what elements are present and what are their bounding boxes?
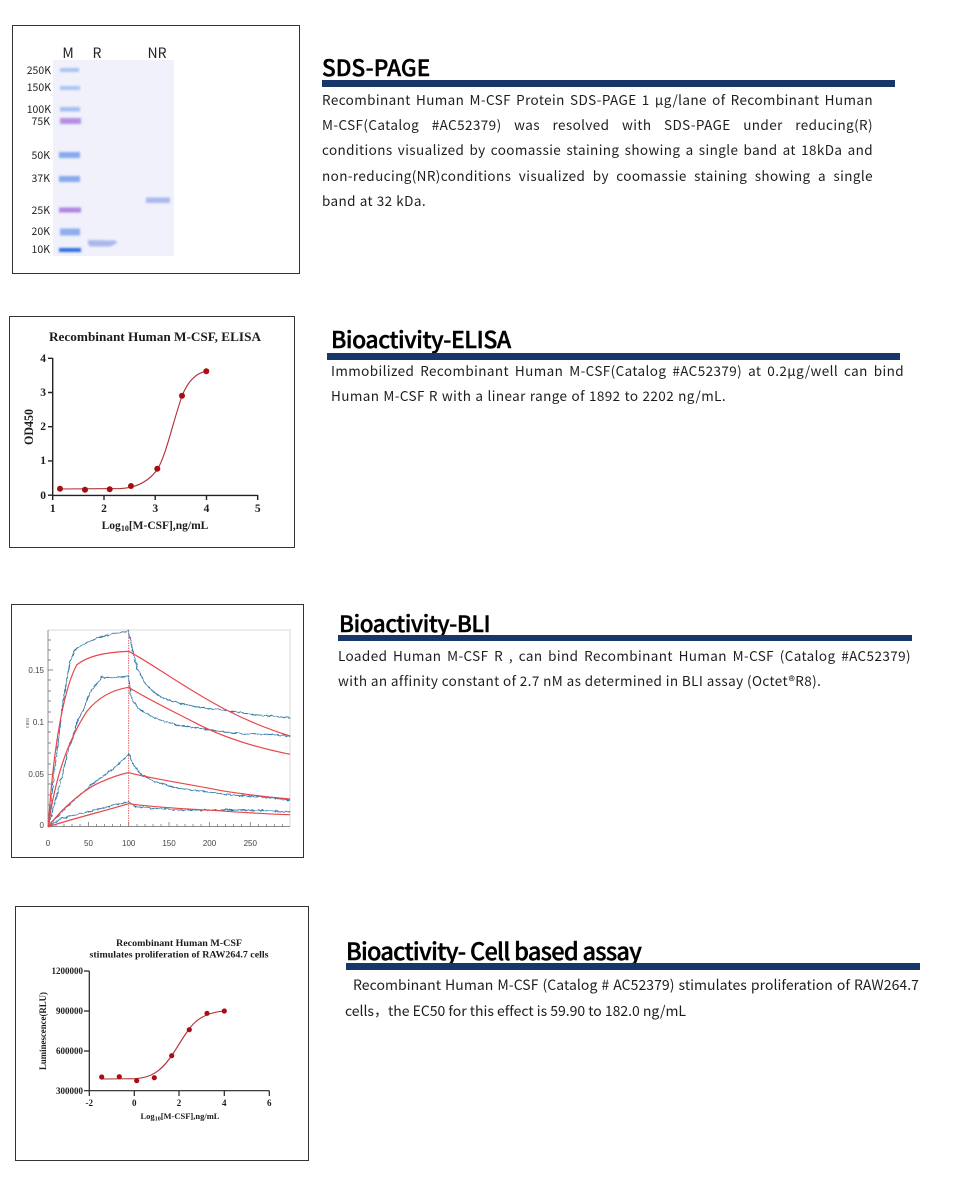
x tick labels: 100 bbox=[122, 839, 136, 848]
marker lane bands bbox=[59, 68, 81, 252]
axes bbox=[84, 971, 269, 1096]
x tick labels: 1 bbox=[50, 503, 56, 515]
heading: Bioactivity-BLI: Bioactivity-BLI bbox=[339, 607, 490, 639]
text block: BLI description: Loaded Human M-CSF R , can bind Recombinant Human M-CSF (Catalog #AC52379) bbox=[338, 645, 911, 665]
text block: SDS-PAGE description bbox=[322, 89, 873, 210]
lane labels: M bbox=[62, 43, 74, 63]
x tick labels bbox=[50, 503, 261, 515]
chart title bbox=[90, 939, 269, 960]
molecular weight labels: 100K bbox=[27, 102, 51, 117]
molecular weight labels: 20K bbox=[32, 224, 50, 239]
y tick labels: 4 bbox=[40, 353, 46, 365]
text block: SDS-PAGE description: band at 32 kDa. bbox=[322, 190, 426, 210]
y tick labels: 0.05 bbox=[28, 770, 45, 779]
heading: Bioactivity-ELISA: Bioactivity-ELISA bbox=[331, 321, 511, 355]
text block: SDS-PAGE description: Recombinant Human M-CSF Protein SDS-PAGE 1 μg/lane of Recombinant Human bbox=[322, 89, 873, 109]
chart title: stimulates proliferation of RAW264.7 cells bbox=[90, 950, 269, 960]
x axis label clipped at edge: Time(s) bbox=[154, 848, 181, 857]
molecular weight labels: 37K bbox=[32, 171, 50, 186]
NR lane band bbox=[146, 198, 170, 203]
fitted curve bbox=[102, 1011, 224, 1079]
x tick labels bbox=[46, 839, 258, 848]
y tick labels bbox=[52, 966, 84, 1096]
y tick labels: 0 bbox=[40, 490, 46, 502]
x tick labels: 0 bbox=[46, 839, 51, 848]
molecular weight labels: 10K bbox=[32, 242, 50, 257]
fitted curve bbox=[60, 371, 206, 489]
y tick labels: 300000 bbox=[56, 1086, 84, 1096]
blue measured traces bbox=[48, 630, 290, 827]
x tick labels: 5 bbox=[255, 503, 261, 515]
y tick labels: 1200000 bbox=[52, 966, 84, 976]
molecular weight labels: 150K bbox=[27, 80, 51, 95]
molecular weight labels bbox=[27, 63, 51, 257]
molecular weight labels: 25K bbox=[32, 203, 50, 218]
x tick labels: 200 bbox=[203, 839, 217, 848]
text block: cell based assay description bbox=[345, 975, 919, 1021]
x tick labels: 4 bbox=[204, 503, 210, 515]
x axis label: [M-CSF],ng/mL bbox=[161, 1111, 220, 1121]
panel: BLI sensorgram chart bbox=[11, 604, 304, 858]
plot frame bbox=[48, 630, 290, 826]
text block: cell based assay description: cells，the EC50 for this effect is 59.90 to 182.0 ng/mL bbox=[345, 1001, 686, 1021]
x tick labels: 2 bbox=[177, 1098, 182, 1108]
lane labels: R bbox=[93, 43, 102, 63]
text block: cell based assay description: Recombinant Human M-CSF (Catalog # AC52379) stimulates proliferation of RAW264.7 bbox=[353, 975, 919, 995]
lane labels bbox=[62, 43, 167, 63]
panel: ELISA chart bbox=[9, 316, 295, 548]
gel background bbox=[53, 60, 174, 256]
axes with ticks bbox=[48, 630, 290, 826]
x axis label: 10 bbox=[155, 1116, 161, 1122]
x tick labels: 250 bbox=[244, 839, 258, 848]
x tick labels bbox=[86, 1098, 272, 1108]
x tick labels: 2 bbox=[101, 503, 107, 515]
molecular weight labels: 250K bbox=[27, 63, 51, 78]
x tick labels: 150 bbox=[162, 839, 176, 848]
x axis label: 10 bbox=[121, 524, 129, 533]
heading: SDS-PAGE: SDS-PAGE bbox=[322, 51, 430, 83]
y tick labels: 0.1 bbox=[33, 718, 45, 727]
red fitted curves bbox=[48, 651, 290, 827]
x tick labels: 0 bbox=[132, 1098, 137, 1108]
panel: cell based assay chart bbox=[15, 906, 309, 1161]
panel: SDS-PAGE gel image bbox=[12, 25, 300, 274]
chart title: Recombinant Human M-CSF bbox=[116, 939, 242, 949]
y tick labels: 600000 bbox=[56, 1046, 84, 1056]
x tick labels: 3 bbox=[152, 503, 158, 515]
x tick labels: 50 bbox=[84, 839, 93, 848]
y tick labels bbox=[28, 666, 45, 830]
text block: SDS-PAGE description: M-CSF(Catalog #AC52379) was resolved with SDS-PAGE under reducing(R) bbox=[322, 114, 873, 134]
chart title: Recombinant Human M-CSF, ELISA bbox=[49, 330, 261, 344]
text block: SDS-PAGE description: non-reducing(NR)conditions visualized by coomassie staining showing a single bbox=[322, 165, 873, 185]
text block: SDS-PAGE description: conditions visualized by coomassie staining showing a single band at 18kDa and bbox=[322, 139, 873, 159]
text block: ELISA description: Human M-CSF R with a linear range of 1892 to 2202 ng/mL. bbox=[331, 385, 726, 405]
y axis label: OD450 bbox=[22, 409, 36, 445]
y tick labels bbox=[40, 353, 46, 502]
y axis label: nm bbox=[24, 718, 31, 728]
text block: ELISA description bbox=[331, 360, 904, 405]
molecular weight labels: 50K bbox=[32, 148, 50, 163]
y axis label: Luminescence(RLU) bbox=[38, 992, 48, 1070]
lane labels: NR bbox=[147, 43, 167, 63]
text block: BLI description: with an affinity constant of 2.7 nM as determined in BLI assay (Octet®R8). bbox=[338, 670, 821, 690]
x tick labels: -2 bbox=[86, 1098, 94, 1108]
y tick labels: 900000 bbox=[56, 1006, 84, 1016]
y tick labels: 0.15 bbox=[28, 666, 45, 675]
y tick labels: 3 bbox=[40, 387, 46, 399]
heading: Bioactivity- Cell based assay: Bioactivity- Cell based assay bbox=[346, 933, 641, 967]
x axis label: Log bbox=[141, 1111, 155, 1121]
y tick labels: 1 bbox=[40, 455, 46, 467]
data points bbox=[99, 1008, 227, 1083]
molecular weight labels: 75K bbox=[32, 114, 50, 129]
axes bbox=[48, 358, 258, 500]
y tick labels: 0 bbox=[40, 821, 45, 830]
x axis label: Log bbox=[102, 520, 121, 532]
x axis label: [M-CSF],ng/mL bbox=[129, 520, 209, 532]
association end marker bbox=[128, 630, 130, 827]
x tick labels: 6 bbox=[267, 1098, 272, 1108]
data points bbox=[57, 368, 209, 493]
text block: BLI description bbox=[338, 645, 911, 690]
y tick labels: 2 bbox=[40, 421, 46, 433]
text block: ELISA description: Immobilized Recombinant Human M-CSF(Catalog #AC52379) at 0.2μg/well can bind bbox=[331, 360, 904, 380]
R lane band bbox=[88, 240, 117, 246]
x tick labels: 4 bbox=[222, 1098, 227, 1108]
